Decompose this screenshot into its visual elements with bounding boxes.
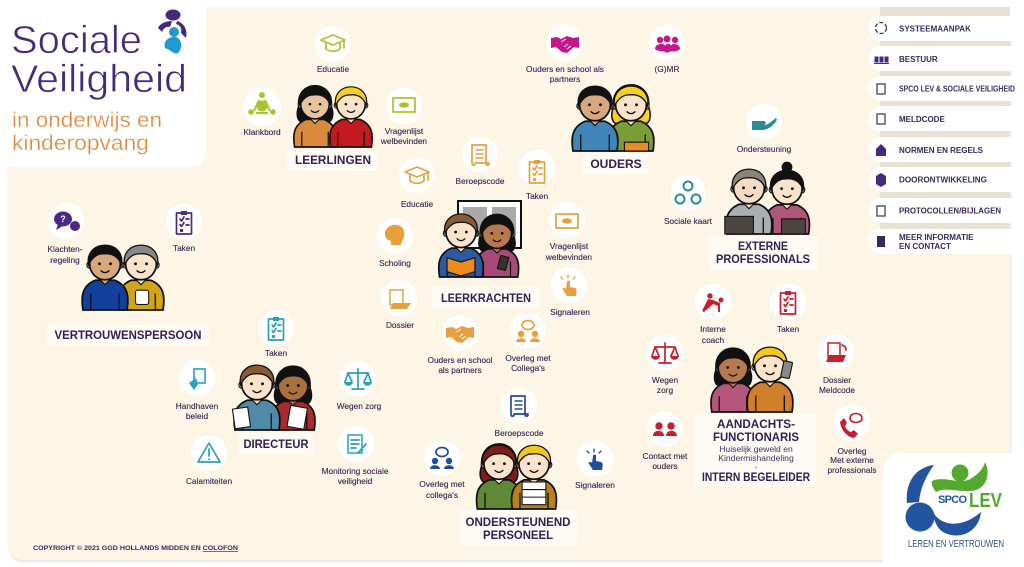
people: directeur	[232, 365, 315, 430]
label: aandachtsfunctionaris: Huiselijk geweld en	[719, 444, 793, 454]
icon: ondersteuning	[737, 104, 792, 154]
icon: taken: Taken	[265, 348, 287, 358]
people: vertrouwenspersoon	[82, 245, 164, 310]
icon: beroepscode	[495, 388, 544, 438]
icon: educatie	[399, 157, 435, 209]
icon: handhaven beleid	[176, 360, 219, 421]
people: ouders	[572, 85, 654, 151]
icon: educatie: Educatie	[401, 199, 434, 209]
label: aandachtsfunctionaris: FUNCTIONARIS	[713, 430, 799, 444]
icon: sociale kaart	[664, 175, 713, 226]
icon: dossier meldcode	[818, 334, 855, 395]
icon: ondersteuning: Ondersteuning	[737, 144, 792, 154]
icon: klachtenregeling: regeling	[50, 255, 80, 265]
icon: vragenlijst: welbevinden	[380, 136, 427, 146]
label: leerlingen: LEERLINGEN	[295, 153, 371, 167]
icon: wegen zorg: Wegen	[652, 375, 678, 385]
label: aandachtsfunctionaris: INTERN BEGELEIDER	[702, 470, 810, 484]
icon: vragenlijst	[545, 202, 592, 262]
icon: handhaven beleid: beleid	[186, 411, 208, 421]
icon: wegen zorg	[647, 335, 683, 395]
label: aandachtsfunctionaris	[695, 413, 816, 487]
icon: signaleren	[550, 267, 590, 317]
icon: gmr	[649, 25, 685, 74]
icon: dossier meldcode: Meldcode	[819, 385, 855, 395]
icon: overleg externe professionals: Met externe	[830, 455, 874, 465]
label: aandachtsfunctionaris: AANDACHTS-	[717, 417, 795, 431]
group: leerlingen	[243, 26, 427, 171]
icon: vragenlijst: Vragenlijst	[550, 241, 589, 251]
icon: gmr: (G)MR	[655, 64, 679, 74]
icon: vragenlijst: Vragenlijst	[385, 126, 424, 136]
icon: overleg externe professionals: professionals	[828, 465, 876, 475]
group: ondersteunend personeel	[419, 388, 615, 545]
people: aandachts	[711, 347, 793, 412]
people: leerlingen	[294, 86, 372, 147]
label: ouders	[583, 153, 648, 174]
icon: handhaven beleid: Handhaven	[176, 401, 219, 411]
icon: overleg: Collega's	[511, 363, 545, 373]
icon: overleg	[505, 313, 551, 373]
menu item: normen en regels	[869, 137, 1024, 162]
label: vertrouwenspersoon	[46, 324, 209, 346]
icon: calamiteiten: Calamiteiten	[186, 476, 232, 486]
title: Sociale	[11, 19, 142, 62]
menu item: doorontwikkeling: DOORONTWIKKELING	[899, 176, 987, 184]
icon: beroepscode: Beroepscode	[495, 428, 544, 438]
label: ondersteunend personeel: ONDERSTEUNEND	[466, 515, 571, 529]
label: ondersteunend personeel	[460, 510, 577, 545]
icon: klachtenregeling	[47, 203, 84, 265]
label: vertrouwenspersoon: VERTROUWENSPERSOON	[54, 328, 202, 342]
icon: wegen zorg	[337, 361, 382, 411]
icon: klankbord: Klankbord	[243, 127, 281, 137]
icon: klachtenregeling: ?	[60, 214, 66, 224]
logo panel	[883, 453, 1024, 567]
icon: taken: Taken	[526, 191, 548, 201]
icon: scholing: Scholing	[379, 258, 411, 268]
menu item: systeemaanpak	[869, 16, 1024, 41]
icon: dossier meldcode: Dossier	[823, 375, 851, 385]
icon: klachtenregeling: Klachten-	[47, 244, 83, 254]
icon: signaleren	[575, 441, 615, 490]
menu item: meldcode	[869, 106, 1024, 131]
menu item: systeemaanpak: SYSTEEMAANPAK	[899, 24, 971, 34]
group: externe professionals	[664, 104, 818, 270]
group: aandachtsfunctionaris	[643, 284, 876, 487]
people: externe	[725, 162, 809, 234]
label: ondersteunend personeel: PERSONEEL	[483, 528, 553, 542]
menu item: spco lev	[869, 76, 1024, 101]
logo text lev: LEV	[969, 490, 1003, 512]
icon: ouders en school: als partners	[438, 365, 482, 375]
icon: calamiteiten	[186, 435, 232, 486]
icon: monitoring: veiligheid	[338, 476, 373, 486]
icon: overleg: Overleg met	[419, 479, 465, 489]
icon: contact met ouders: Contact met	[643, 451, 688, 461]
icon: overleg externe professionals: Overleg	[837, 446, 867, 456]
icon: ouders en school: Ouders en school	[427, 355, 493, 365]
label: leerkrachten: LEERKRACHTEN	[441, 291, 531, 305]
icon: interne coach: Interne	[700, 324, 726, 334]
icon: interne coach	[695, 284, 731, 345]
menu item: doorontwikkeling	[869, 167, 1024, 192]
icon: contact met ouders	[643, 411, 688, 471]
icon: sociale kaart: Sociale kaart	[664, 216, 713, 226]
icon: taken	[166, 203, 202, 253]
icon: signaleren: Signaleren	[575, 480, 615, 490]
icon: taken: Taken	[777, 324, 799, 334]
label: aandachtsfunctionaris: Kindermishandeling	[718, 453, 794, 463]
label: directeur	[239, 433, 314, 454]
label: directeur: DIRECTEUR	[244, 437, 309, 451]
icon: educatie	[315, 26, 351, 74]
subtitle orange: in onderwijs en	[12, 109, 162, 132]
group: vertrouwenspersoon	[46, 203, 209, 346]
icon: overleg	[419, 440, 465, 500]
menu item: meldcode: MELDCODE	[899, 115, 945, 124]
label: leerkrachten	[432, 287, 540, 308]
icon: overleg: collega's	[426, 490, 458, 500]
label: externe professionals: EXTERNE	[738, 239, 788, 253]
icon: taken	[519, 150, 555, 201]
logo text: SPCO	[938, 494, 967, 506]
icon: vragenlijst	[380, 88, 427, 146]
icon: taken: Taken	[173, 243, 195, 253]
copyright: COPYRIGHT © 2021 GGD HOLLANDS MIDDEN EN COLOFON	[33, 544, 238, 552]
icon: handshake	[526, 25, 604, 84]
icon: monitoring: Monitoring sociale	[322, 466, 389, 476]
logo: green swoosh	[932, 462, 988, 492]
people: leerkrachten	[439, 214, 519, 277]
icon: scholing	[377, 218, 413, 268]
icon: overleg externe professionals	[828, 405, 876, 475]
subtitle: Veiligheid	[11, 58, 187, 101]
menu item: meer informatie: EN CONTACT	[899, 242, 951, 251]
icon: handshake: Ouders en school als	[526, 64, 604, 74]
menu item: bestuur	[869, 46, 1024, 71]
label: externe professionals	[709, 236, 818, 270]
label: leerlingen	[287, 150, 378, 171]
logo: blue crescent	[906, 465, 981, 535]
group: leerkrachten	[377, 137, 592, 375]
label: externe professionals: PROFESSIONALS	[716, 252, 810, 266]
menu item: protocollen: PROTOCOLLEN/BIJLAGEN	[899, 206, 1001, 216]
menu	[869, 7, 1024, 254]
people: ondersteunend	[477, 444, 556, 509]
icon: signaleren: Signaleren	[550, 307, 590, 317]
menu item: meer informatie	[869, 229, 1024, 254]
icon: wegen zorg: Wegen zorg	[337, 401, 382, 411]
icon: wegen zorg: zorg	[657, 385, 673, 395]
icon: contact met ouders: ouders	[652, 461, 678, 471]
icon: interne coach: coach	[702, 335, 724, 345]
board	[458, 201, 521, 248]
icon: klankbord	[243, 88, 281, 137]
icon: overleg: Overleg met	[505, 353, 551, 363]
group: ouders	[526, 25, 685, 174]
menu item: protocollen	[869, 198, 1024, 223]
menu item: normen en regels: NORMEN EN REGELS	[899, 146, 984, 155]
icon: people logo	[158, 10, 187, 53]
menu item: bestuur: BESTUUR	[899, 55, 938, 64]
icon: taken	[258, 310, 294, 358]
label: ouders: OUDERS	[590, 157, 642, 171]
icon: monitoring	[322, 426, 389, 486]
subtitle orange line two: kinderopvang	[12, 132, 149, 155]
icon: vragenlijst: welbevinden	[545, 252, 592, 262]
icon: beroepscode: Beroepscode	[456, 176, 505, 186]
icon: handshake: partners	[550, 74, 580, 84]
header panel	[0, 0, 206, 167]
group: directeur	[176, 310, 389, 486]
icon: dossier: Dossier	[386, 320, 414, 330]
icon: taken	[770, 284, 806, 334]
icon: educatie: Educatie	[317, 64, 350, 74]
label: aandachtsfunctionaris: -	[755, 462, 758, 472]
icon: ouders en school	[427, 315, 493, 375]
icon: beroepscode	[456, 137, 505, 186]
menu item: meer informatie: MEER INFORMATIE	[899, 233, 974, 242]
icon: dossier	[381, 280, 417, 330]
